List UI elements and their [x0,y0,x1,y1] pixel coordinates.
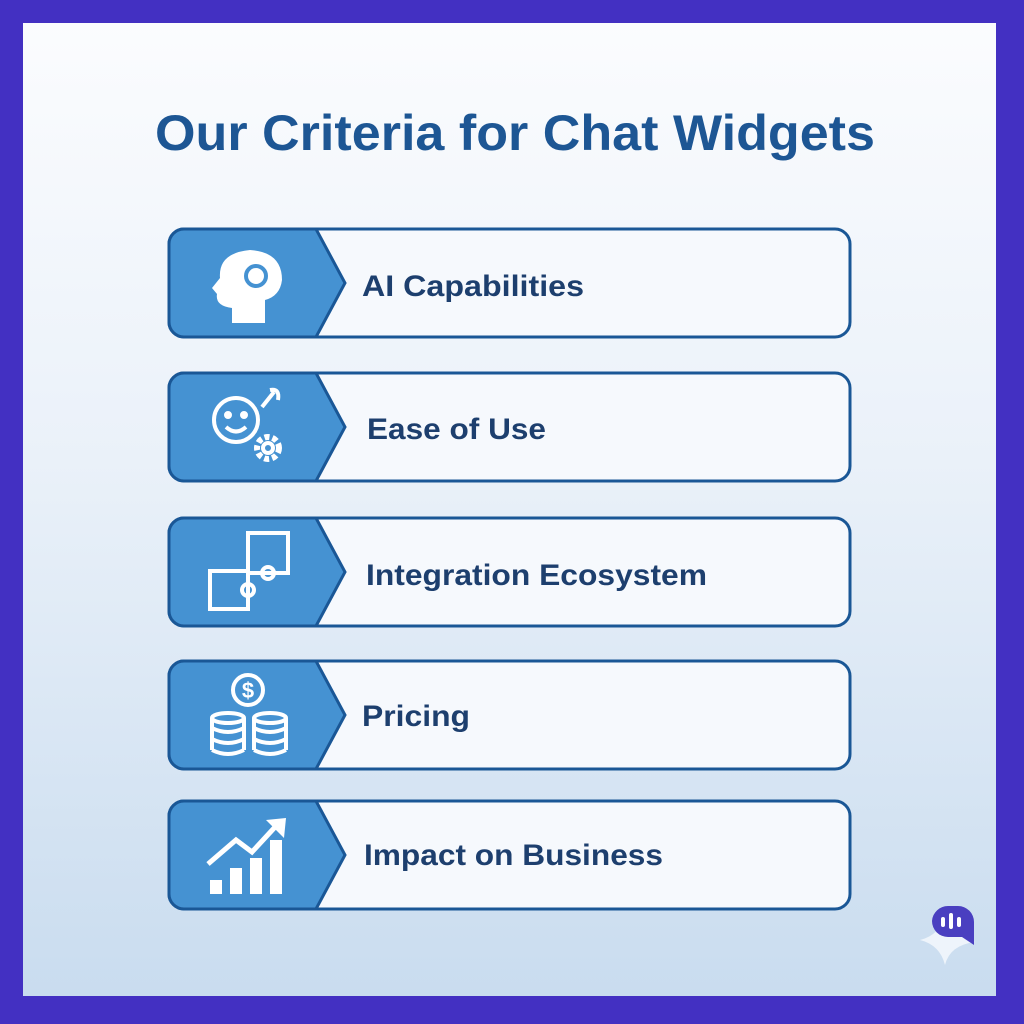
title: Our Criteria for Chat Widgets [155,105,875,161]
row: Pricing: Pricing [362,700,470,733]
icon: brain head [212,250,282,323]
row: Integration Ecosystem [169,518,850,626]
row: Ease of Use: Ease of Use [367,413,546,446]
icon: growth chart [208,818,286,894]
row: Ease of Use [169,373,850,481]
icon: chat logo [920,906,975,965]
icon: coins: $ [242,678,254,703]
icon: puzzle pieces [210,533,288,609]
icon: smiley with gear [214,390,279,459]
row: Impact on Business: Impact on Business [364,839,663,872]
row: AI Capabilities: AI Capabilities [362,270,584,303]
row: Impact on Business [169,801,850,909]
row: Integration Ecosystem: Integration Ecosystem [366,559,707,592]
icon: coins [212,675,286,754]
row: Pricing [169,661,850,769]
row: AI Capabilities [169,229,850,337]
